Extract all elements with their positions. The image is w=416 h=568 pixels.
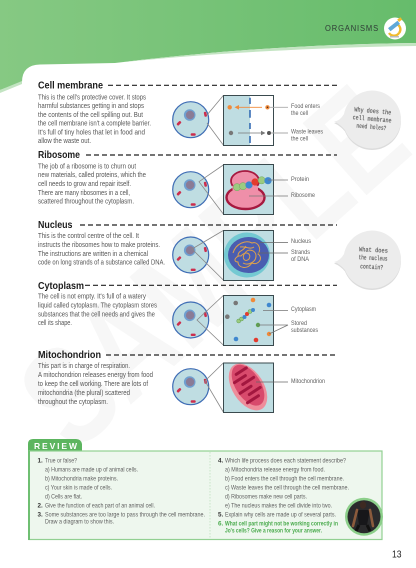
text block: Ribosome	[38, 163, 146, 206]
text block: Nucleus: instructs the ribosomes how to make proteins.	[38, 242, 160, 249]
text block: Mitochondrion: This part is in charge of respiration.	[38, 363, 130, 370]
text block: Cytoplasm	[38, 294, 157, 327]
review questions: left column	[38, 458, 205, 526]
text block: Cytoplasm: cell its shape.	[38, 320, 72, 327]
review questions: right column: 6.	[218, 520, 224, 528]
label: Waste leaves the cell: the cell	[291, 136, 308, 142]
text block: Ribosome: There are many ribosomes in a cell,	[38, 190, 130, 197]
heading: Mitochondrion: Mitochondrion	[38, 349, 101, 361]
review questions: right column: Which life process does each statement describe?	[225, 458, 346, 464]
diagram: nucleus	[173, 230, 288, 280]
text block: Ribosome: The job of a ribosome is to churn out	[38, 163, 136, 170]
review questions: left column: d) Cells are flat.	[45, 494, 82, 500]
label: Stored substances	[291, 320, 318, 334]
text block: Cytoplasm: liquid called cytoplasm. The cytoplasm stores	[38, 303, 157, 310]
heading: Nucleus: Nucleus	[38, 219, 73, 231]
label: Stored substances: Stored	[291, 320, 307, 327]
review questions: left column: Some substances are too large to pass through the cell membrane.	[45, 512, 205, 518]
label: Waste leaves the cell	[291, 128, 323, 142]
label: Cytoplasm: Cytoplasm	[291, 306, 316, 313]
callout: What does the nucleus contain?: contain?	[360, 263, 383, 273]
diagram: ribosome	[173, 164, 288, 214]
review questions: right column: a) Mitochondria release energy from food.	[225, 466, 325, 474]
review questions: left column: 2.	[38, 502, 43, 510]
text block: Cell membrane	[38, 94, 151, 145]
heading: Ribosome: Ribosome	[38, 149, 80, 161]
text block: Mitochondrion: throughout the cytoplasm.	[38, 399, 108, 406]
text block: Nucleus: The instructions are written in a chemical	[38, 251, 148, 258]
review questions: right column: c) Waste leaves the cell through the cell membrane.	[225, 484, 349, 492]
callout: Why does the cell membrane need holes?: cell membrane	[352, 114, 392, 126]
review questions: left column: a) Humans are made up of animal cells.	[45, 466, 138, 474]
review questions: right column: Explain why cells are made up of several parts.	[225, 512, 336, 518]
text block: Mitochondrion: A mitochondrion releases energy from food	[38, 372, 153, 379]
page number: 13	[392, 550, 402, 560]
callout: What does the nucleus contain?: the nucleus	[358, 254, 388, 264]
text block: Mitochondrion: mitochondria (the plural) scattered	[38, 390, 130, 397]
review questions: right column: 4.	[218, 458, 224, 464]
label: Food enters the cell: Food enters	[291, 103, 320, 110]
review questions: right column: d) Ribosomes make new cell parts.	[225, 494, 307, 500]
text block: Mitochondrion: to keep the cell working. There are lots of	[38, 381, 148, 388]
label: Nucleus: Nucleus	[291, 238, 311, 245]
label: Food enters the cell	[291, 103, 320, 117]
review questions: left column: True or false?	[45, 458, 77, 464]
callout: Why does the cell membrane need holes?: Why does the	[354, 106, 391, 118]
review questions: right column	[218, 458, 349, 534]
text block: Cell membrane: harmful substances getting in and stops	[38, 103, 144, 110]
diagram: cytoplasm	[173, 296, 288, 346]
review questions: right column: e) The nucleus makes the cell divide into two.	[225, 502, 332, 510]
review tab heading: REVIEW	[34, 441, 78, 451]
label: Strands of DNA: Strands	[291, 249, 310, 256]
label: Waste leaves the cell: Waste leaves	[291, 128, 323, 135]
label: Food enters the cell: the cell	[291, 110, 308, 117]
label: Strands of DNA	[291, 249, 310, 263]
text block: Nucleus: This is the control centre of the cell. It	[38, 233, 139, 240]
callout: Why does the cell membrane need holes?	[334, 90, 401, 150]
heading: Cell membrane: Cell membrane	[38, 80, 103, 92]
text block: Ribosome: new materials, called proteins, which the	[38, 172, 146, 179]
review questions: right column: b) Food enters the cell through the cell membrane.	[225, 476, 344, 482]
review questions: left column: Draw a diagram to show this.	[45, 518, 114, 526]
text block: Cell membrane: the contents of the cell spilling out. But	[38, 112, 143, 119]
review questions: right column: What cell part might not be working correctly in	[225, 520, 338, 528]
review questions: left column: 1.	[38, 458, 43, 464]
diagram: mitochondrion	[173, 357, 288, 417]
green header band	[0, 0, 416, 93]
icon: microscope	[384, 17, 406, 40]
callout: Why does the cell membrane need holes?: need holes?	[356, 123, 387, 133]
review questions: left column: c) Your skin is made of cells.	[45, 484, 112, 492]
label: Strands of DNA: of DNA	[291, 256, 310, 263]
text block: Cell membrane: allow the waste out.	[38, 138, 91, 145]
review questions: left column: b) Mitochondria make proteins.	[45, 476, 118, 482]
text block: Nucleus: code on long strands of a substance called DNA.	[38, 260, 165, 267]
text block: Cytoplasm: substances that the cell needs and gives the	[38, 312, 155, 318]
text block: Ribosome: scattered throughout the cytoplasm.	[38, 198, 134, 206]
text block: Cell membrane: It's full of tiny holes that let in food and	[38, 129, 145, 136]
label: Stored substances: substances	[291, 327, 318, 334]
diagram: cell membrane	[173, 96, 288, 146]
panel: review	[28, 439, 383, 540]
review questions: right column: Jo's cells? Give a reason for your answer.	[225, 528, 322, 534]
review questions: right column: 5.	[218, 512, 224, 518]
callout: What does the nucleus contain?	[334, 230, 401, 290]
text block: Nucleus	[38, 233, 165, 267]
section label: ORGANISMS: ORGANISMS	[325, 23, 379, 33]
text block: Cytoplasm: The cell is not empty. It's full of a watery	[38, 294, 146, 301]
text block: Ribosome: cell needs to grow and repair itself.	[38, 181, 131, 188]
review questions: left column: Give the function of each part of an animal cell.	[45, 502, 155, 510]
label: Ribosome: Ribosome	[291, 192, 315, 199]
label: Protein: Protein	[291, 176, 309, 183]
heading: Cytoplasm: Cytoplasm	[38, 280, 84, 292]
text block: Cell membrane: This is the cell's protective cover. It stops	[38, 94, 146, 101]
text block: Mitochondrion	[38, 363, 153, 406]
review questions: left column: 3.	[38, 512, 43, 518]
label: Mitochondrion: Mitochondrion	[291, 378, 325, 385]
review tab heading	[28, 439, 82, 452]
callout: What does the nucleus contain?: What does	[359, 246, 388, 256]
photo: Jo exercising	[345, 498, 383, 536]
text block: Cell membrane: the cell membrane isn't a complete barrier.	[38, 120, 151, 128]
